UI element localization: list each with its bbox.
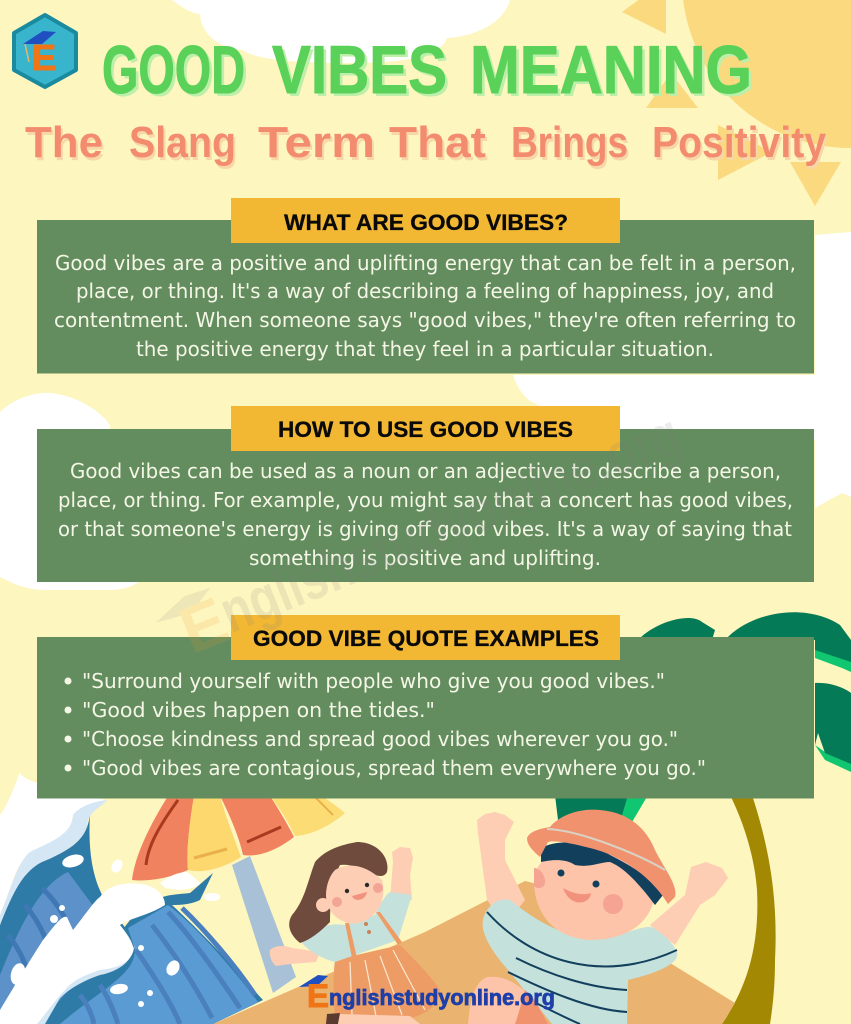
section 3 heading bar [231,615,620,660]
section 1 panel [37,198,814,374]
girl [270,842,440,1024]
ocean wave [0,772,263,1024]
quote list: "Surround yourself with people who give you good vibes." [82,669,665,693]
palm tree [555,612,851,1024]
section 1 body text: Good vibes are a positive and uplifting energy that can be felt in a person, [55,251,796,275]
quote list: "Good vibes happen on the tides." [82,698,435,722]
subtitle: Slang [129,118,236,167]
subtitle [25,118,828,170]
quote list [64,669,706,780]
watermark [149,399,692,676]
subtitle: That [389,118,486,167]
watermark: E [169,583,238,668]
subtitle: That [391,121,488,170]
quote list: "Choose kindness and spread good vibes wherever you go." [82,727,678,751]
section 2 heading: HOW TO USE GOOD VIBES [278,417,573,442]
sand [213,881,735,1024]
section 1 body text: contentment. When someone says "good vibes," they're often referring to [54,308,796,332]
subtitle: Positivity [652,118,826,167]
subtitle: Term [258,118,375,167]
section 2 panel [37,406,814,582]
subtitle: Brings [513,121,630,170]
section 1 body text [54,251,796,361]
section 2 body text: Good vibes can be used as a noun or an adjective to describe a person, [70,459,781,483]
subtitle: The [25,118,103,167]
subtitle: The [27,121,105,170]
subtitle: Slang [131,121,238,170]
section 2 body text: place, or thing. For example, you might say that a concert has good vibes, [58,488,793,512]
quote list: "Good vibes are contagious, spread them everywhere you go." [82,756,706,780]
logo badge [14,15,76,87]
title: MEANING [470,32,752,108]
section 2 body text [58,459,793,570]
subtitle: Positivity [654,121,828,170]
section 1 heading: WHAT ARE GOOD VIBES? [284,210,568,235]
title [102,32,755,111]
section 1 heading bar [231,198,620,243]
section 2 body text: something is positive and uplifting. [249,546,601,570]
footer logo: E [307,978,329,1014]
title: VIBES [272,32,447,108]
sun [622,0,851,206]
section 2 heading bar [231,406,620,451]
watermark: nglishstudyonline.org [211,400,690,646]
section 3 panel [37,615,814,798]
section 1 body text: the positive energy that they feel in a particular situation. [136,337,714,361]
logo badge: E [32,37,56,78]
boy [468,810,728,1024]
beach umbrella [132,796,345,993]
title: MEANING [473,35,755,111]
subtitle: Brings [511,118,628,167]
section 3 heading: GOOD VIBE QUOTE EXAMPLES [253,626,599,651]
title: GOOD [105,35,248,111]
subtitle: Term [260,121,377,170]
footer logo: nglishstudyonline.org [329,985,555,1010]
footer logo [299,975,555,1014]
clouds [0,0,851,590]
title: VIBES [275,35,450,111]
title: GOOD [102,32,245,108]
section 2 body text: or that someone's energy is giving off good vibes. It's a way of saying that [58,517,792,541]
section 1 body text: place, or thing. It's a way of describing a feeling of happiness, joy, and [76,279,774,303]
